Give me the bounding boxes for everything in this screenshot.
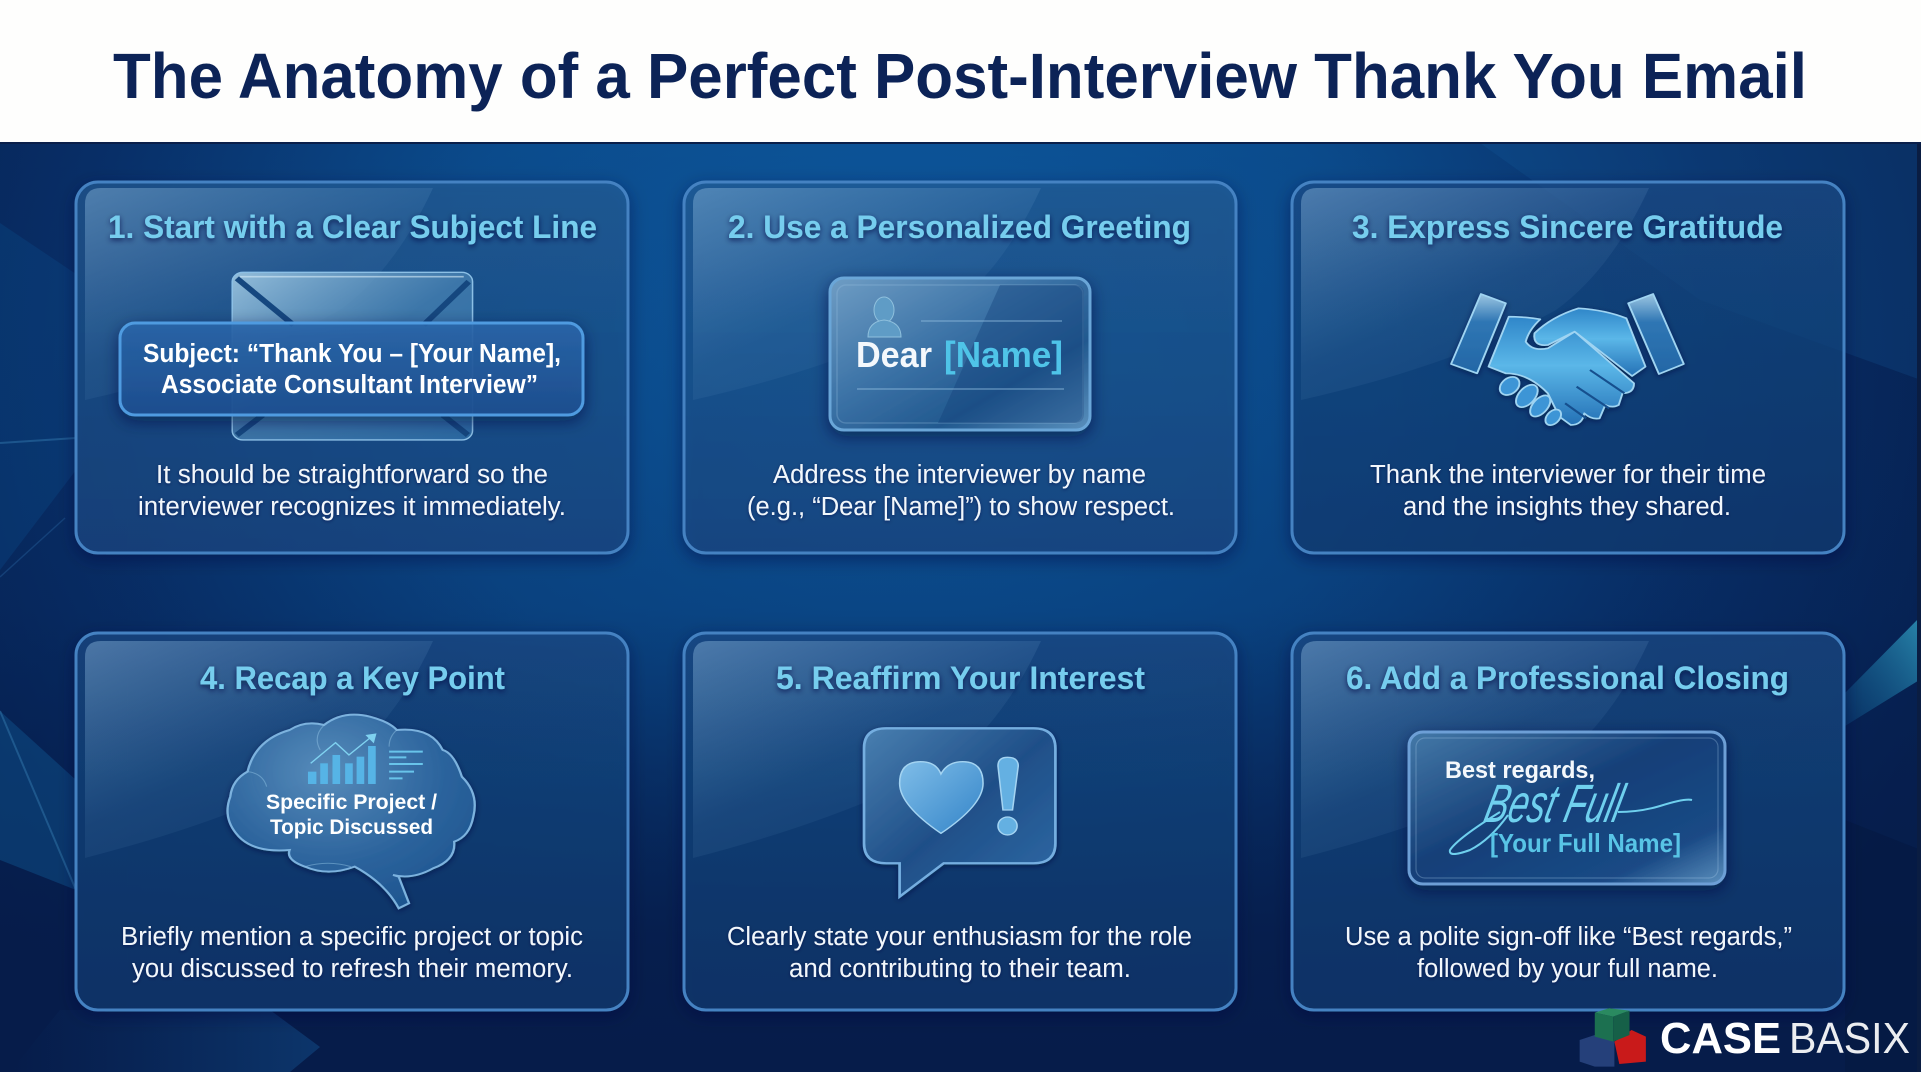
description: followed by your full name. <box>1417 955 1718 983</box>
description <box>747 461 1175 521</box>
bar chart <box>308 733 376 784</box>
panel: 2 greeting <box>684 182 1236 553</box>
description: It should be straightforward so the <box>156 461 548 489</box>
description: and the insights they shared. <box>1403 493 1731 521</box>
heading: 3. Express Sincere Gratitude <box>1352 209 1783 245</box>
subject box: Subject: “Thank You – [Your Name], <box>143 340 561 368</box>
description: Thank the interviewer for their time <box>1370 461 1766 489</box>
icon: brain cloud <box>228 715 475 908</box>
title: The Anatomy of a Perfect Post-Interview Thank You Email <box>113 40 1807 112</box>
description <box>121 923 583 983</box>
icon: envelope <box>232 272 473 440</box>
icon: person <box>868 297 901 337</box>
description <box>1370 461 1766 521</box>
logo <box>1580 1008 1910 1067</box>
signature: Best Full <box>1479 773 1631 834</box>
description <box>1345 923 1792 983</box>
name card: Dear <box>856 334 932 375</box>
description: (e.g., “Dear [Name]”) to show respect. <box>747 493 1175 521</box>
logo: CASE <box>1660 1014 1781 1063</box>
panel: 3 gratitude <box>1292 182 1844 553</box>
heading: 1. Start with a Clear Subject Line <box>108 209 597 245</box>
subject box <box>120 323 583 415</box>
logo: BASIX <box>1789 1014 1910 1063</box>
icon: speech bubble heart <box>864 728 1055 897</box>
brain text <box>266 791 437 839</box>
name card <box>830 278 1090 430</box>
signature card <box>1409 732 1725 884</box>
description <box>727 923 1192 983</box>
signature card: Best regards, <box>1445 757 1595 784</box>
signature card: [Your Full Name] <box>1490 828 1681 858</box>
panel: 5 interest <box>684 633 1236 1010</box>
heading: 2. Use a Personalized Greeting <box>728 209 1191 245</box>
icon: handshake <box>1451 294 1684 428</box>
name card: [Name] <box>944 334 1063 375</box>
icon: cubes <box>1580 1008 1646 1067</box>
description: Clearly state your enthusiasm for the role <box>727 923 1192 951</box>
heading: 5. Reaffirm Your Interest <box>776 660 1145 696</box>
panel: 6 closing <box>1292 633 1844 1010</box>
signature <box>1450 773 1692 854</box>
header band <box>0 0 1921 144</box>
panel: 1 subject line <box>76 182 628 553</box>
brain text: Specific Project / <box>266 791 437 814</box>
description: and contributing to their team. <box>789 955 1131 983</box>
description: you discussed to refresh their memory. <box>132 955 573 983</box>
description: interviewer recognizes it immediately. <box>138 493 566 521</box>
subject box: Associate Consultant Interview” <box>161 371 538 399</box>
description <box>138 461 566 521</box>
description: Address the interviewer by name <box>773 461 1146 489</box>
description: Use a polite sign-off like “Best regards,” <box>1345 923 1792 951</box>
description: Briefly mention a specific project or topic <box>121 923 583 951</box>
panel: 4 recap <box>76 633 628 1010</box>
brain text: Topic Discussed <box>270 816 433 839</box>
heading: 6. Add a Professional Closing <box>1346 660 1789 696</box>
heading: 4. Recap a Key Point <box>200 660 505 696</box>
